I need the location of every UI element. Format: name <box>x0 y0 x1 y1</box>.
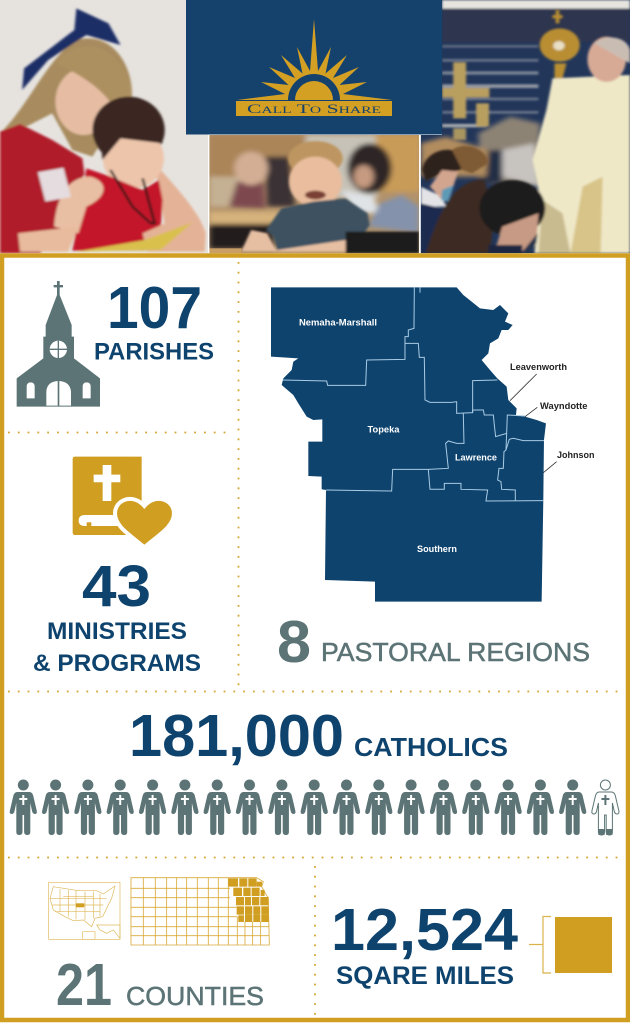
panel: parishes <box>17 275 214 407</box>
map labels: Wayndotte <box>540 401 588 412</box>
icon: church <box>17 281 100 407</box>
map: USA with Kansas highlighted <box>49 882 120 939</box>
label: ministries and programs: MINISTRIES <box>47 618 187 645</box>
stat: 181,000: 181,000 <box>129 703 344 769</box>
logo: Call To Share sun <box>236 19 392 116</box>
stat: 107: 107 <box>107 275 202 341</box>
label: ministries and programs <box>33 618 201 677</box>
map labels: Leavenworth <box>510 362 567 373</box>
stat: 43: 43 <box>82 554 151 619</box>
label: counties: COUNTIES <box>126 981 264 1011</box>
photo: smiling boy in classroom <box>209 135 420 253</box>
photo: girls reading <box>0 0 208 253</box>
map labels: Johnson <box>557 450 595 461</box>
stat: 21: 21 <box>56 952 112 1018</box>
label: pastoral regions: PASTORAL REGIONS <box>321 637 590 667</box>
label: square miles: SQARE MILES <box>336 962 514 990</box>
map labels: Nemaha-Marshall <box>299 318 377 328</box>
panel: counties <box>49 878 269 1018</box>
pictogram: people <box>10 780 619 835</box>
icon: bible and heart <box>73 457 174 547</box>
logo: Call To Share sun: Call To Share <box>247 102 382 116</box>
map: Kansas counties <box>131 878 269 945</box>
panel: square miles <box>331 897 612 990</box>
panel: pastoral regions <box>271 287 595 675</box>
gold frame <box>2 256 628 1020</box>
label: ministries and programs: & PROGRAMS <box>33 650 201 677</box>
label: parishes: PARISHES <box>94 338 214 366</box>
map: pastoral regions <box>271 287 557 602</box>
stat: 12,524: 12,524 <box>331 897 518 963</box>
stat: 8: 8 <box>277 609 311 675</box>
map labels: Lawrence <box>455 452 497 464</box>
panel: ministries and programs <box>33 457 201 677</box>
map labels <box>299 318 595 555</box>
blue logo panel <box>186 0 442 134</box>
icon: gold square <box>555 917 612 973</box>
bracket <box>529 916 551 973</box>
photo: bishop with monstrance and students <box>421 0 630 253</box>
label: catholics: CATHOLICS <box>354 732 508 762</box>
panel: catholics <box>10 703 619 835</box>
map labels: Topeka <box>368 424 400 436</box>
map labels: Southern <box>417 544 457 555</box>
